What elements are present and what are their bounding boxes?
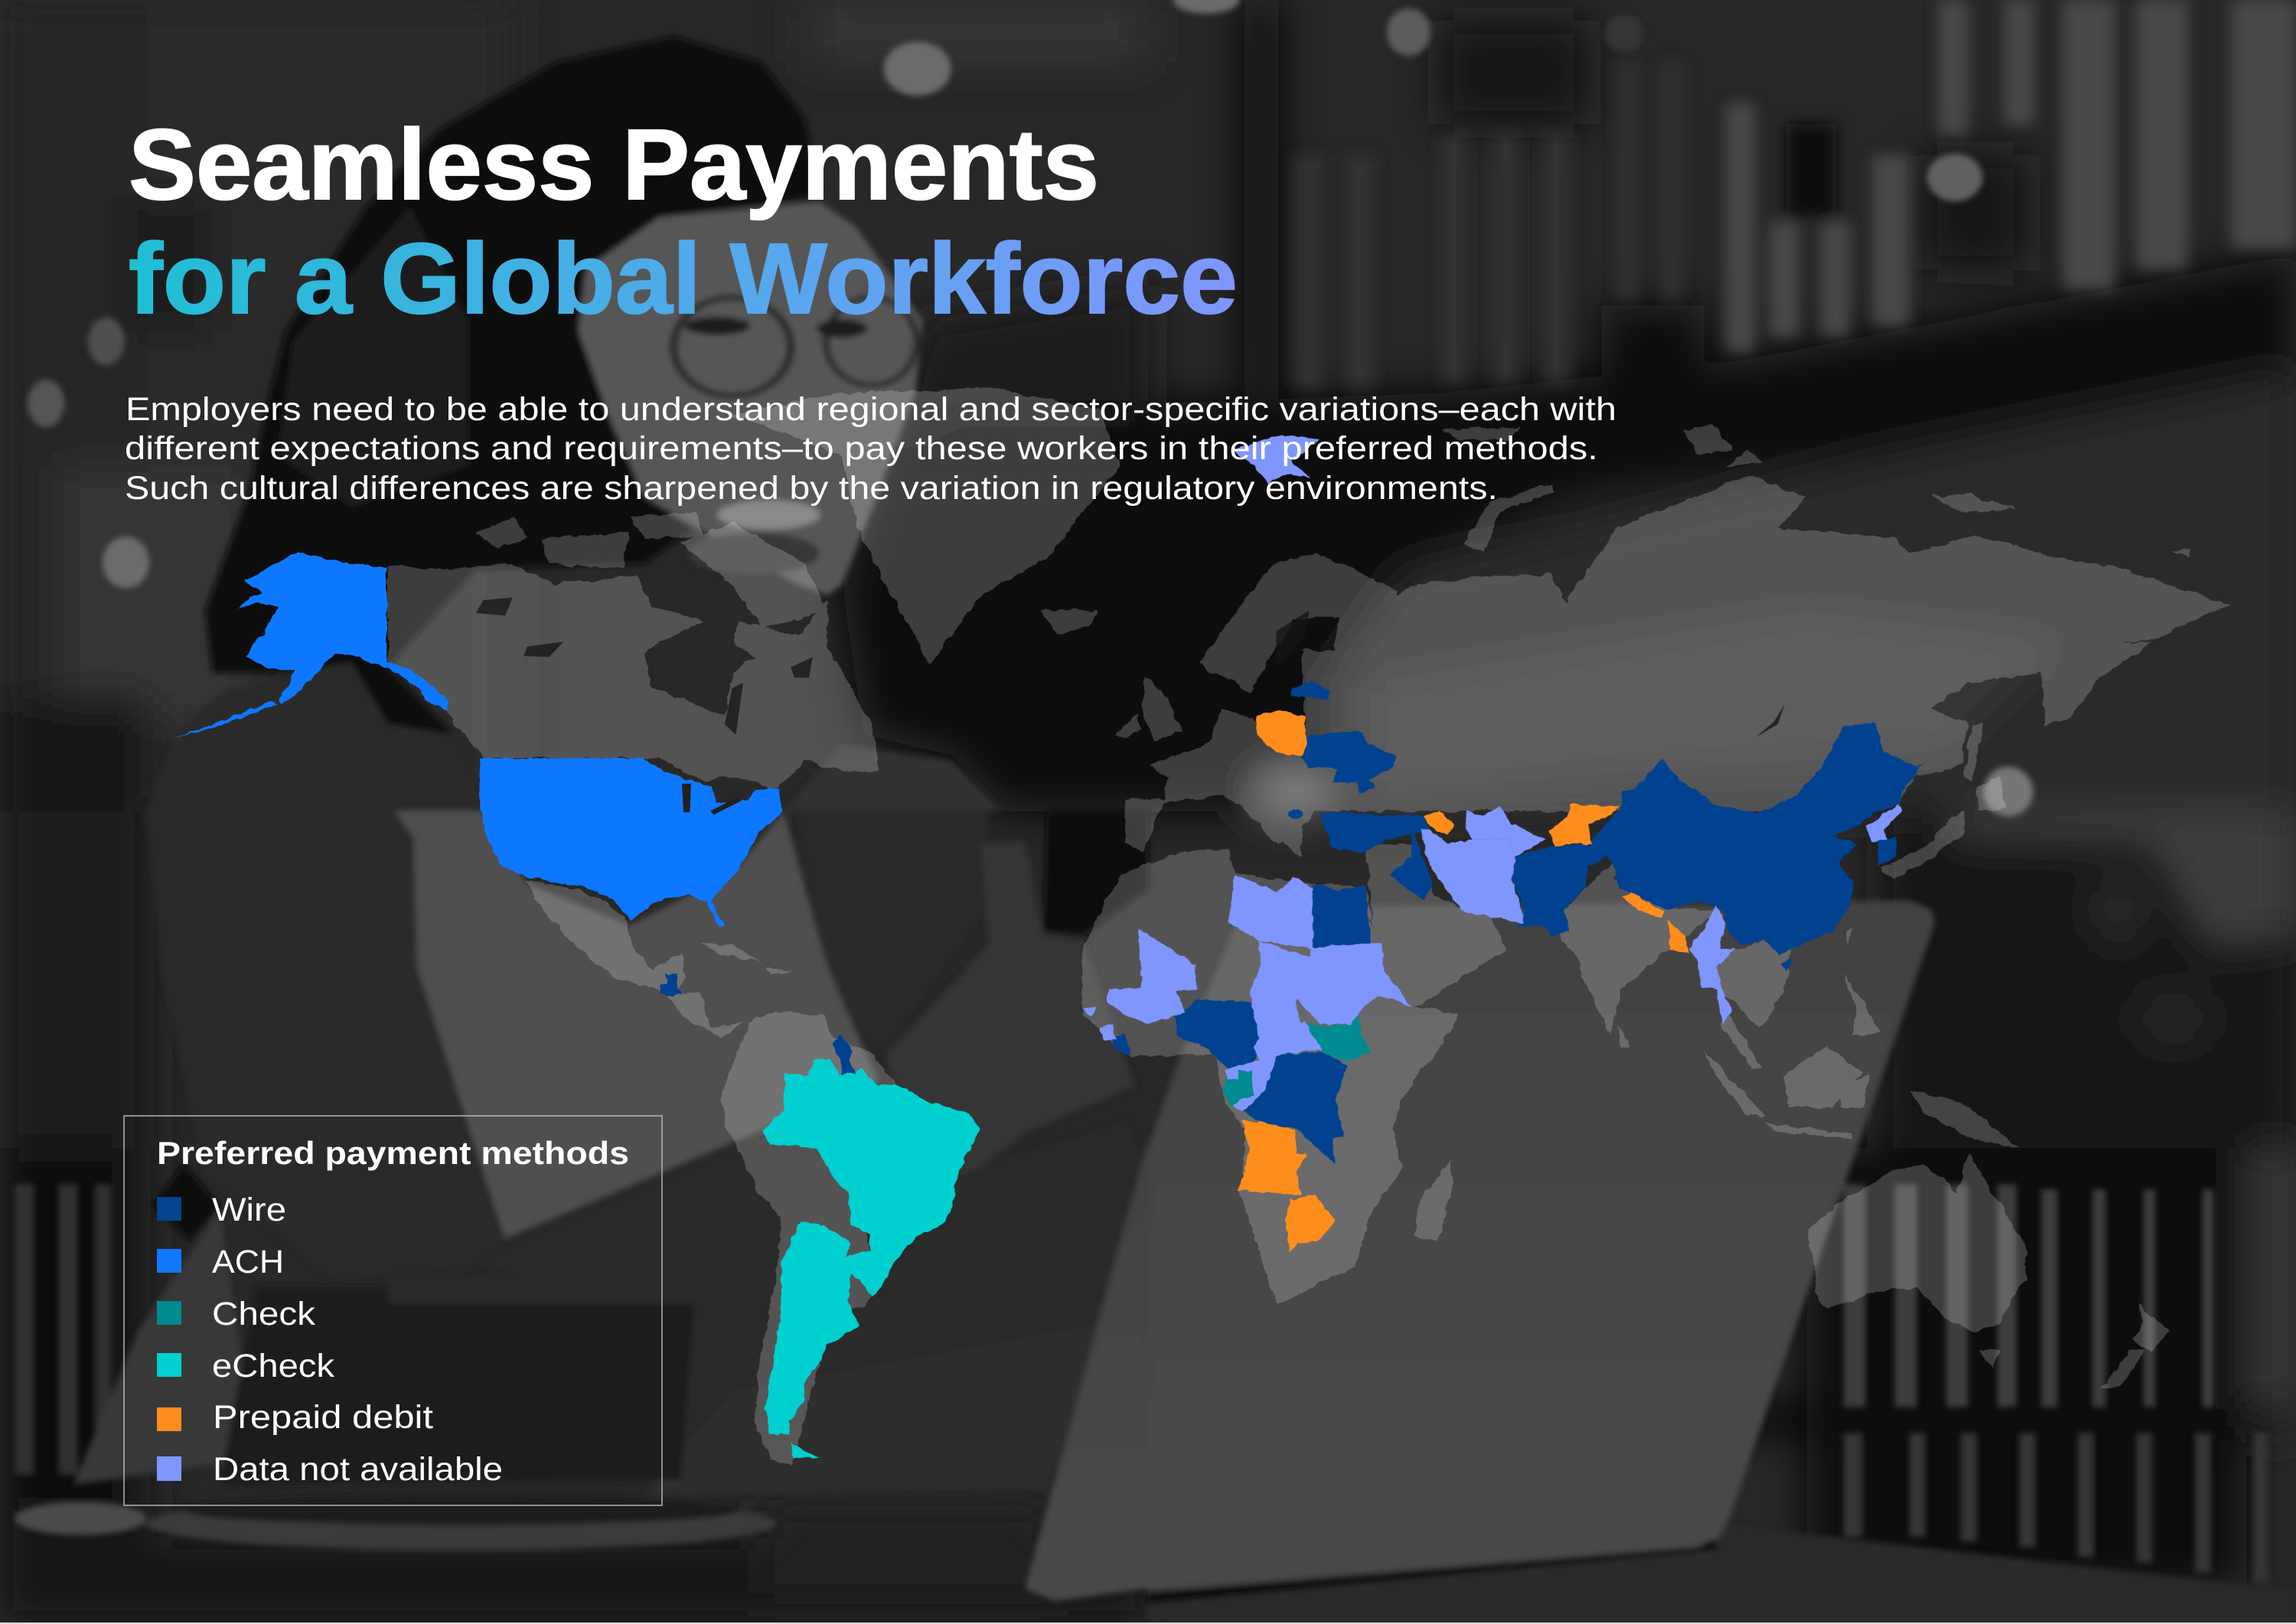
legend: check — [157, 1296, 316, 1332]
Guatemala — [660, 974, 682, 997]
legend panel — [124, 1116, 662, 1505]
land masses — [388, 388, 2232, 1466]
ACH: United States — [174, 552, 782, 927]
hair — [146, 36, 1003, 811]
Africa — [1082, 848, 1457, 1305]
Iceland — [1039, 611, 1098, 634]
Hokkaido — [1975, 776, 2004, 811]
Sierra Leone — [1101, 1024, 1116, 1042]
title line 1: Seamless Payments — [129, 108, 1099, 220]
Kamchatka — [2041, 639, 2151, 724]
Congo surround (data not available) — [1225, 1055, 1277, 1112]
Russia — [1316, 476, 2232, 811]
Mexico and Central America — [523, 879, 744, 1038]
legend: eCheck: eCheck — [212, 1348, 335, 1384]
intro paragraph: different expectations and requirements–to pay these workers in their preferred methods. — [125, 430, 1598, 467]
blurred cafe stripes — [1294, 0, 2296, 388]
Angola — [1239, 1120, 1308, 1195]
Taiwan — [1844, 928, 1854, 945]
India — [1561, 857, 1720, 1035]
Latvia — [1290, 681, 1329, 701]
intro paragraph: Employers need to be able to understand regional and sector-specific variations–each with — [126, 391, 1616, 428]
China — [1588, 723, 1924, 956]
Nigeria — [1176, 1000, 1260, 1072]
legend heading: Preferred payment methods — [157, 1135, 629, 1171]
Bulgaria — [1288, 809, 1303, 819]
Arctic islands — [1463, 484, 1554, 553]
Sumatra — [1704, 1050, 1765, 1116]
Sudan — [1296, 943, 1411, 1024]
Southeast Asia — [1717, 923, 1795, 1068]
New Guinea — [1910, 1091, 2019, 1148]
Canada — [388, 564, 879, 789]
stripes of the railing — [1148, 1184, 2296, 1624]
Liberia — [1113, 1032, 1131, 1057]
Argentina — [765, 1221, 870, 1434]
legend: ACH: ACH — [212, 1244, 284, 1280]
Japan — [1880, 811, 1965, 879]
New Zealand — [2133, 1303, 2169, 1352]
Aleutians — [174, 701, 276, 738]
Georgia and Azerbaijan — [1424, 811, 1454, 835]
title — [129, 108, 1238, 334]
Libya — [1228, 875, 1313, 949]
Brazil — [762, 1060, 980, 1298]
Australia — [1807, 1153, 2027, 1332]
Svalbard — [1232, 435, 1320, 484]
DR Congo — [1244, 1052, 1347, 1165]
Turkey — [1320, 811, 1430, 853]
legend: eCheck — [157, 1348, 335, 1384]
Guyana — [832, 1034, 856, 1075]
legend: data not available: Data not available — [213, 1451, 503, 1488]
laptop lid — [1148, 900, 1935, 1604]
Poland — [1256, 709, 1306, 756]
Chad — [1250, 941, 1311, 1037]
Sakhalin — [1965, 724, 1984, 781]
UK and Ireland — [1140, 677, 1182, 741]
Sulawesi — [1838, 1077, 1869, 1107]
Scandinavia — [1199, 553, 1397, 693]
Madagascar — [1415, 1159, 1452, 1241]
Check: Gabon and South Sudan — [1222, 1009, 1371, 1112]
South Korea — [1878, 837, 1896, 866]
Iran — [1420, 828, 1525, 923]
Central African Republic — [1254, 1022, 1323, 1072]
contiguous United States — [480, 758, 782, 927]
Tajikistan and Kyrgyzstan — [1548, 804, 1619, 846]
bokeh lights — [28, 0, 2033, 817]
Prepaid debit: countries — [1239, 709, 1689, 1252]
South America — [722, 1012, 905, 1466]
Egypt — [1313, 883, 1371, 947]
Botswana — [1287, 1195, 1336, 1252]
body, tank top, arms and cup — [15, 811, 1148, 1601]
Senegal — [1082, 1006, 1097, 1017]
Arabia — [1365, 844, 1506, 1006]
Greenland — [732, 388, 1120, 665]
intro paragraph — [125, 391, 1616, 507]
Gabon — [1222, 1070, 1254, 1107]
Ukraine — [1299, 732, 1396, 794]
Caribbean — [701, 942, 760, 961]
legend: check: Check — [212, 1296, 316, 1332]
legend: wire — [157, 1192, 286, 1228]
face — [579, 202, 922, 595]
North Korea — [1866, 804, 1903, 842]
intro paragraph: Such cultural differences are sharpened by the variation in regulatory environments. — [125, 470, 1498, 507]
Mali — [1107, 928, 1197, 1024]
legend: prepaid debit: Prepaid debit — [213, 1399, 433, 1436]
Europe — [1125, 708, 1338, 857]
Hainan — [1780, 960, 1792, 971]
Great Lakes — [682, 784, 742, 815]
Bangladesh — [1668, 921, 1689, 954]
Philippines — [1844, 976, 1881, 1037]
shoulders — [146, 662, 483, 811]
Afghanistan and Pakistan — [1512, 844, 1613, 936]
world map — [174, 388, 2232, 1466]
Java — [1765, 1123, 1851, 1139]
legend: wire: Wire — [212, 1192, 286, 1228]
Iraq — [1390, 827, 1433, 901]
inland lakes — [476, 598, 1785, 737]
Data not available: countries — [1082, 435, 1903, 1072]
Borneo — [1783, 1046, 1863, 1107]
title line 2: for a Global Workforce — [129, 222, 1238, 334]
Turkmenistan and Uzbekistan — [1466, 807, 1545, 857]
Nepal — [1622, 892, 1665, 918]
Alaska — [238, 552, 448, 711]
Central Asia and Mongolia — [1302, 651, 1924, 804]
Sri Lanka — [1619, 1024, 1629, 1046]
Tasmania — [1979, 1350, 2001, 1368]
Myanmar — [1689, 905, 1735, 1024]
legend: ACH — [157, 1244, 284, 1280]
Wire: countries — [660, 681, 1924, 1165]
eCheck: Brazil and Argentina — [762, 1060, 980, 1458]
South Sudan — [1305, 1009, 1371, 1061]
